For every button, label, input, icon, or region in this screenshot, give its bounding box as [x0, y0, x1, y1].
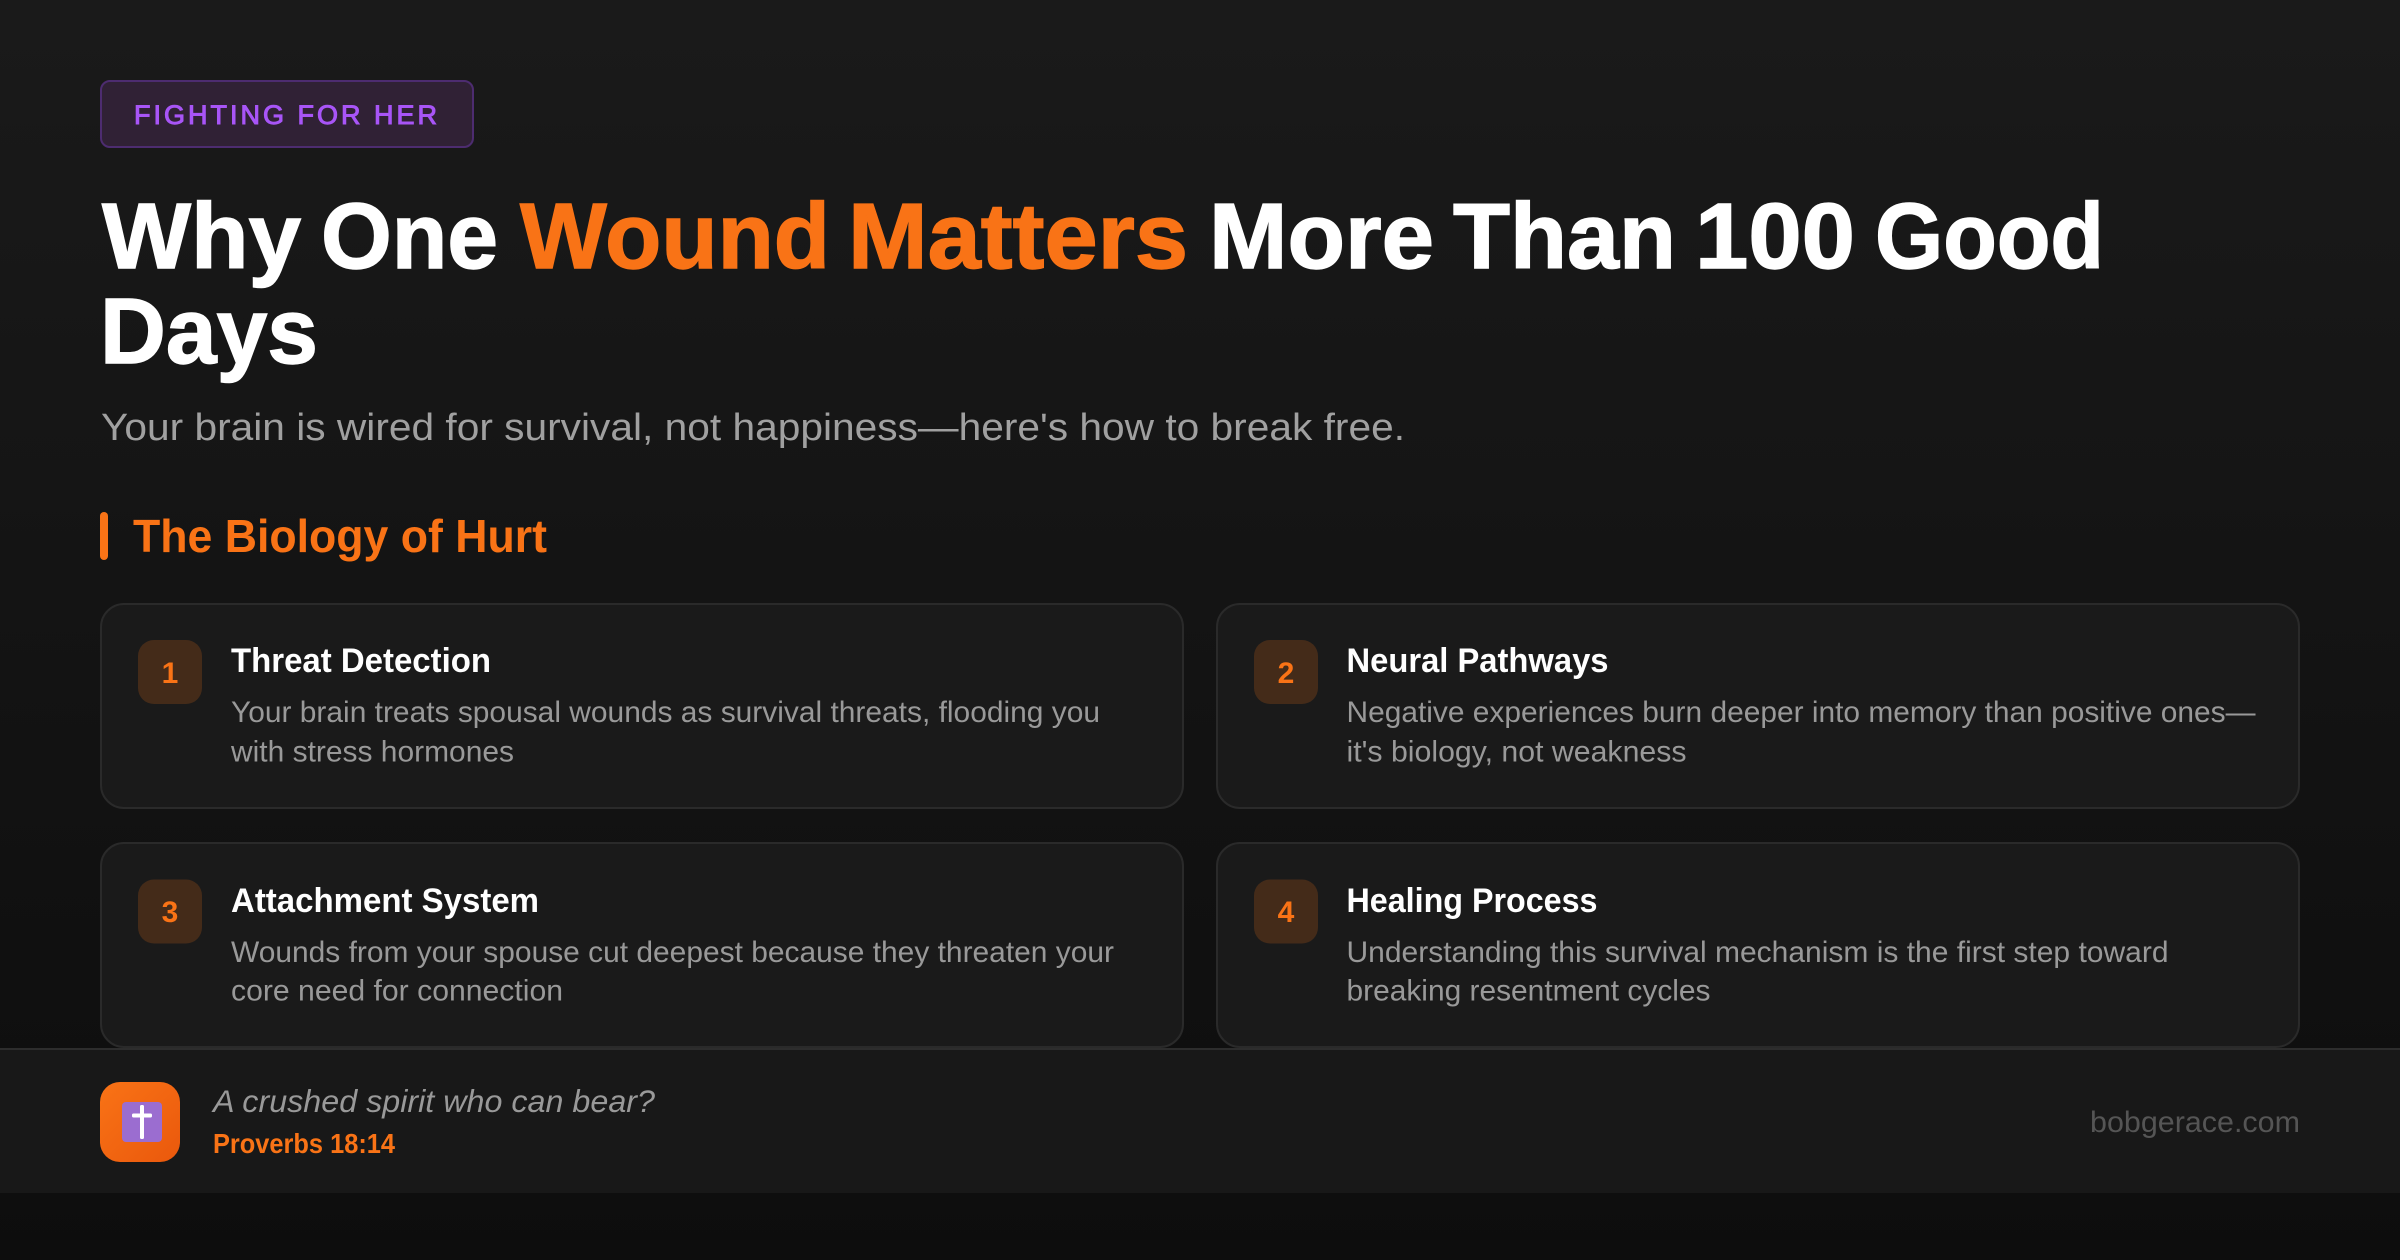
card 2: Neural Pathways: Neural Pathways: [1346, 642, 1608, 680]
title: 100: [1695, 184, 1855, 288]
title: Wound: [520, 184, 830, 288]
card 1: Threat Detection: [101, 604, 1183, 808]
card 1: Threat Detection: with stress hormones: [230, 736, 514, 768]
card 3: Attachment System: Attachment System: [231, 882, 539, 920]
card 3: Attachment System: Wounds from your spouse cut deepest because they threaten your: [231, 936, 1114, 969]
title: Than: [1453, 184, 1676, 288]
card 2: Neural Pathways: 2: [1278, 657, 1294, 690]
card 2: Neural Pathways: it's biology, not weakness: [1346, 736, 1686, 768]
title: Good: [1875, 184, 2104, 288]
badge: Fighting for Her: FIGHTING FOR HER: [134, 100, 437, 130]
card 4: Healing Process: Understanding this survival mechanism is the first step toward: [1346, 936, 2168, 969]
badge: Fighting for Her: [101, 81, 473, 147]
card 3: Attachment System: [101, 843, 1183, 1047]
card 3: Attachment System: 3: [162, 896, 178, 929]
title: One: [321, 184, 498, 288]
icon: cross: [100, 1082, 180, 1162]
card 4: Healing Process: breaking resentment cycles: [1346, 974, 1710, 1008]
card 1: Threat Detection: Threat Detection: [231, 642, 491, 680]
card 3: Attachment System: core need for connection: [231, 974, 563, 1008]
title: Matters: [848, 184, 1188, 288]
website: bobgerace.com: [2090, 1106, 2300, 1139]
subtitle: Your brain is wired for survival, not happiness—here's how to break free.: [101, 407, 1405, 449]
footer bar: [0, 1048, 2400, 1193]
card 4: Healing Process: 4: [1278, 896, 1295, 929]
title: Days: [100, 279, 318, 383]
card 4: Healing Process: [1217, 843, 2299, 1047]
title: [100, 184, 2104, 383]
title: Why: [102, 184, 301, 288]
card 2: Neural Pathways: Negative experiences burn deeper into memory than positive ones—: [1346, 696, 2256, 729]
card 1: Threat Detection: 1: [162, 657, 178, 690]
title: More: [1209, 184, 1434, 288]
scripture reference: Proverbs 18:14: [213, 1128, 396, 1159]
card 1: Threat Detection: Your brain treats spousal wounds as survival threats, flooding you: [231, 696, 1100, 729]
scripture quote: A crushed spirit who can bear?: [211, 1083, 655, 1119]
card 4: Healing Process: Healing Process: [1346, 882, 1598, 920]
section heading: The Biology of Hurt: The Biology of Hurt: [133, 510, 547, 562]
card 2: Neural Pathways: [1217, 604, 2299, 808]
